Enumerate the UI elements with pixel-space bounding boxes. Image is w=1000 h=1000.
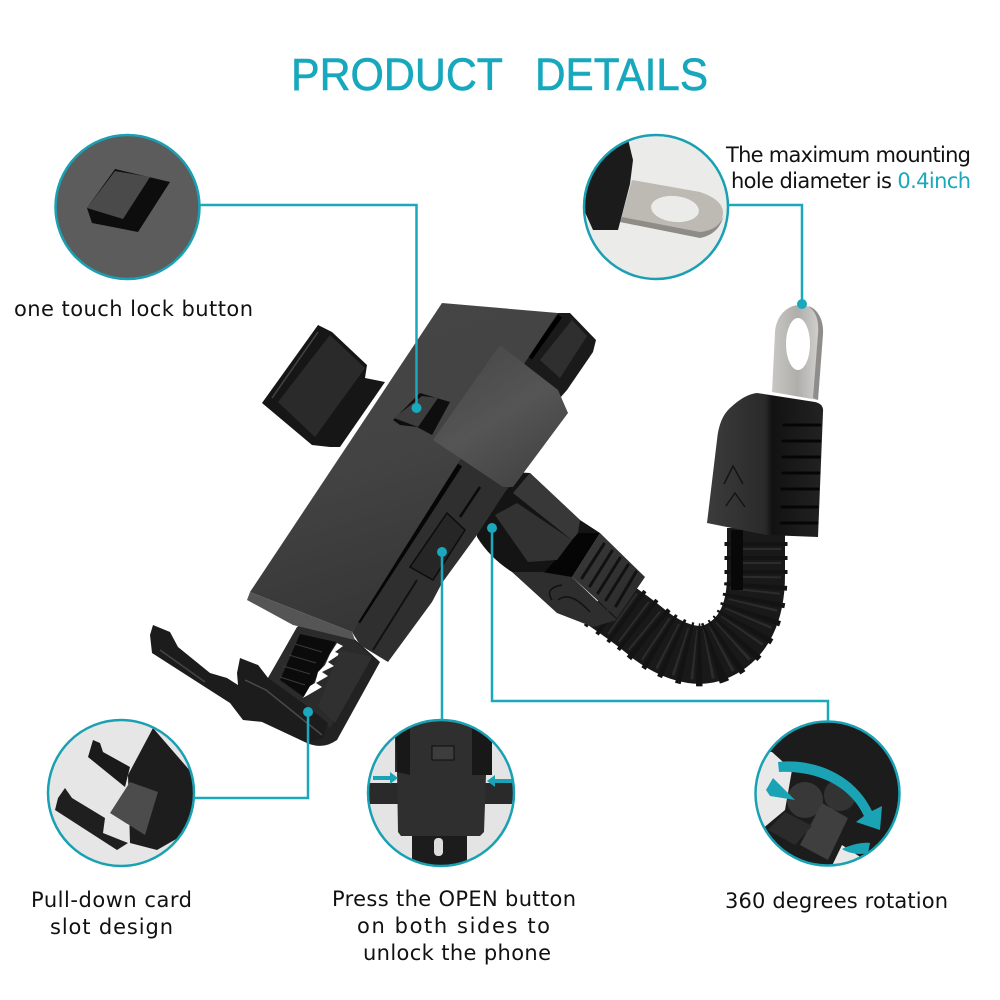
label: open button xyxy=(332,887,576,965)
metal mounting tab xyxy=(772,305,823,400)
label: mounting hole xyxy=(725,143,971,193)
left gripper jaw xyxy=(262,325,385,447)
side rail with OPEN button xyxy=(352,455,515,662)
panel: open button detail xyxy=(365,715,520,870)
icon: metal tab with hole xyxy=(620,180,724,238)
one touch lock button xyxy=(393,393,450,435)
panel: mounting hole detail xyxy=(582,134,730,280)
panel: rotation detail xyxy=(754,720,901,867)
panel: card slot detail xyxy=(45,715,200,870)
icon: dark body xyxy=(128,728,198,850)
label: rotation: 360 degrees rotation xyxy=(725,889,948,913)
label: card slot xyxy=(31,888,192,939)
flexible ribbed neck xyxy=(600,528,756,655)
lip under plate xyxy=(247,592,355,640)
icon: grey slot block xyxy=(110,782,158,835)
callout line: lock button xyxy=(200,205,422,413)
title: DETAILS xyxy=(535,49,708,100)
callout line: card slot xyxy=(194,707,313,798)
title xyxy=(291,49,708,100)
icon: arm xyxy=(800,803,848,860)
right gripper jaw xyxy=(433,345,568,487)
main back plate xyxy=(250,303,558,632)
callout line: open button xyxy=(437,547,447,720)
callout line: mounting hole xyxy=(728,205,807,309)
arrow: press right xyxy=(487,775,512,787)
icon: side buttons xyxy=(368,783,514,804)
label: lock button: one touch lock button xyxy=(14,297,253,321)
lower tray with teeth xyxy=(258,626,380,746)
rear rail behind plate xyxy=(520,313,596,398)
product: phone holder mount xyxy=(150,303,823,746)
label: open button: Press the OPEN button xyxy=(332,887,576,911)
icon: rotation arrows xyxy=(766,761,882,854)
black bolt cap with grip ribs xyxy=(707,393,823,537)
icon: lower foot xyxy=(412,836,467,865)
icon: black cap xyxy=(584,135,633,230)
icon: holder front xyxy=(395,721,486,836)
arrow: press left xyxy=(373,772,398,784)
icon: light background wedges xyxy=(756,752,792,826)
title: PRODUCT xyxy=(291,49,503,100)
label: mounting hole: hole diameter is 0.4inch xyxy=(731,169,971,193)
label: open button: unlock the phone xyxy=(363,941,551,965)
pull-down card slot fingers xyxy=(150,625,328,743)
OPEN release button xyxy=(410,513,465,580)
label: mounting hole: The maximum mounting xyxy=(725,143,971,167)
panel: lock button detail xyxy=(54,134,201,280)
label: open button: on both sides to xyxy=(357,914,550,938)
icon: upper finger xyxy=(88,740,130,787)
label: card slot: slot design xyxy=(50,915,173,939)
icon: lock button close-up xyxy=(87,169,170,232)
label: card slot: Pull-down card xyxy=(31,888,192,912)
callout line: rotation xyxy=(487,523,828,722)
icon: lower finger xyxy=(55,788,128,850)
swivel arm with grip knob xyxy=(470,470,645,627)
icon: ball joint xyxy=(787,782,823,818)
